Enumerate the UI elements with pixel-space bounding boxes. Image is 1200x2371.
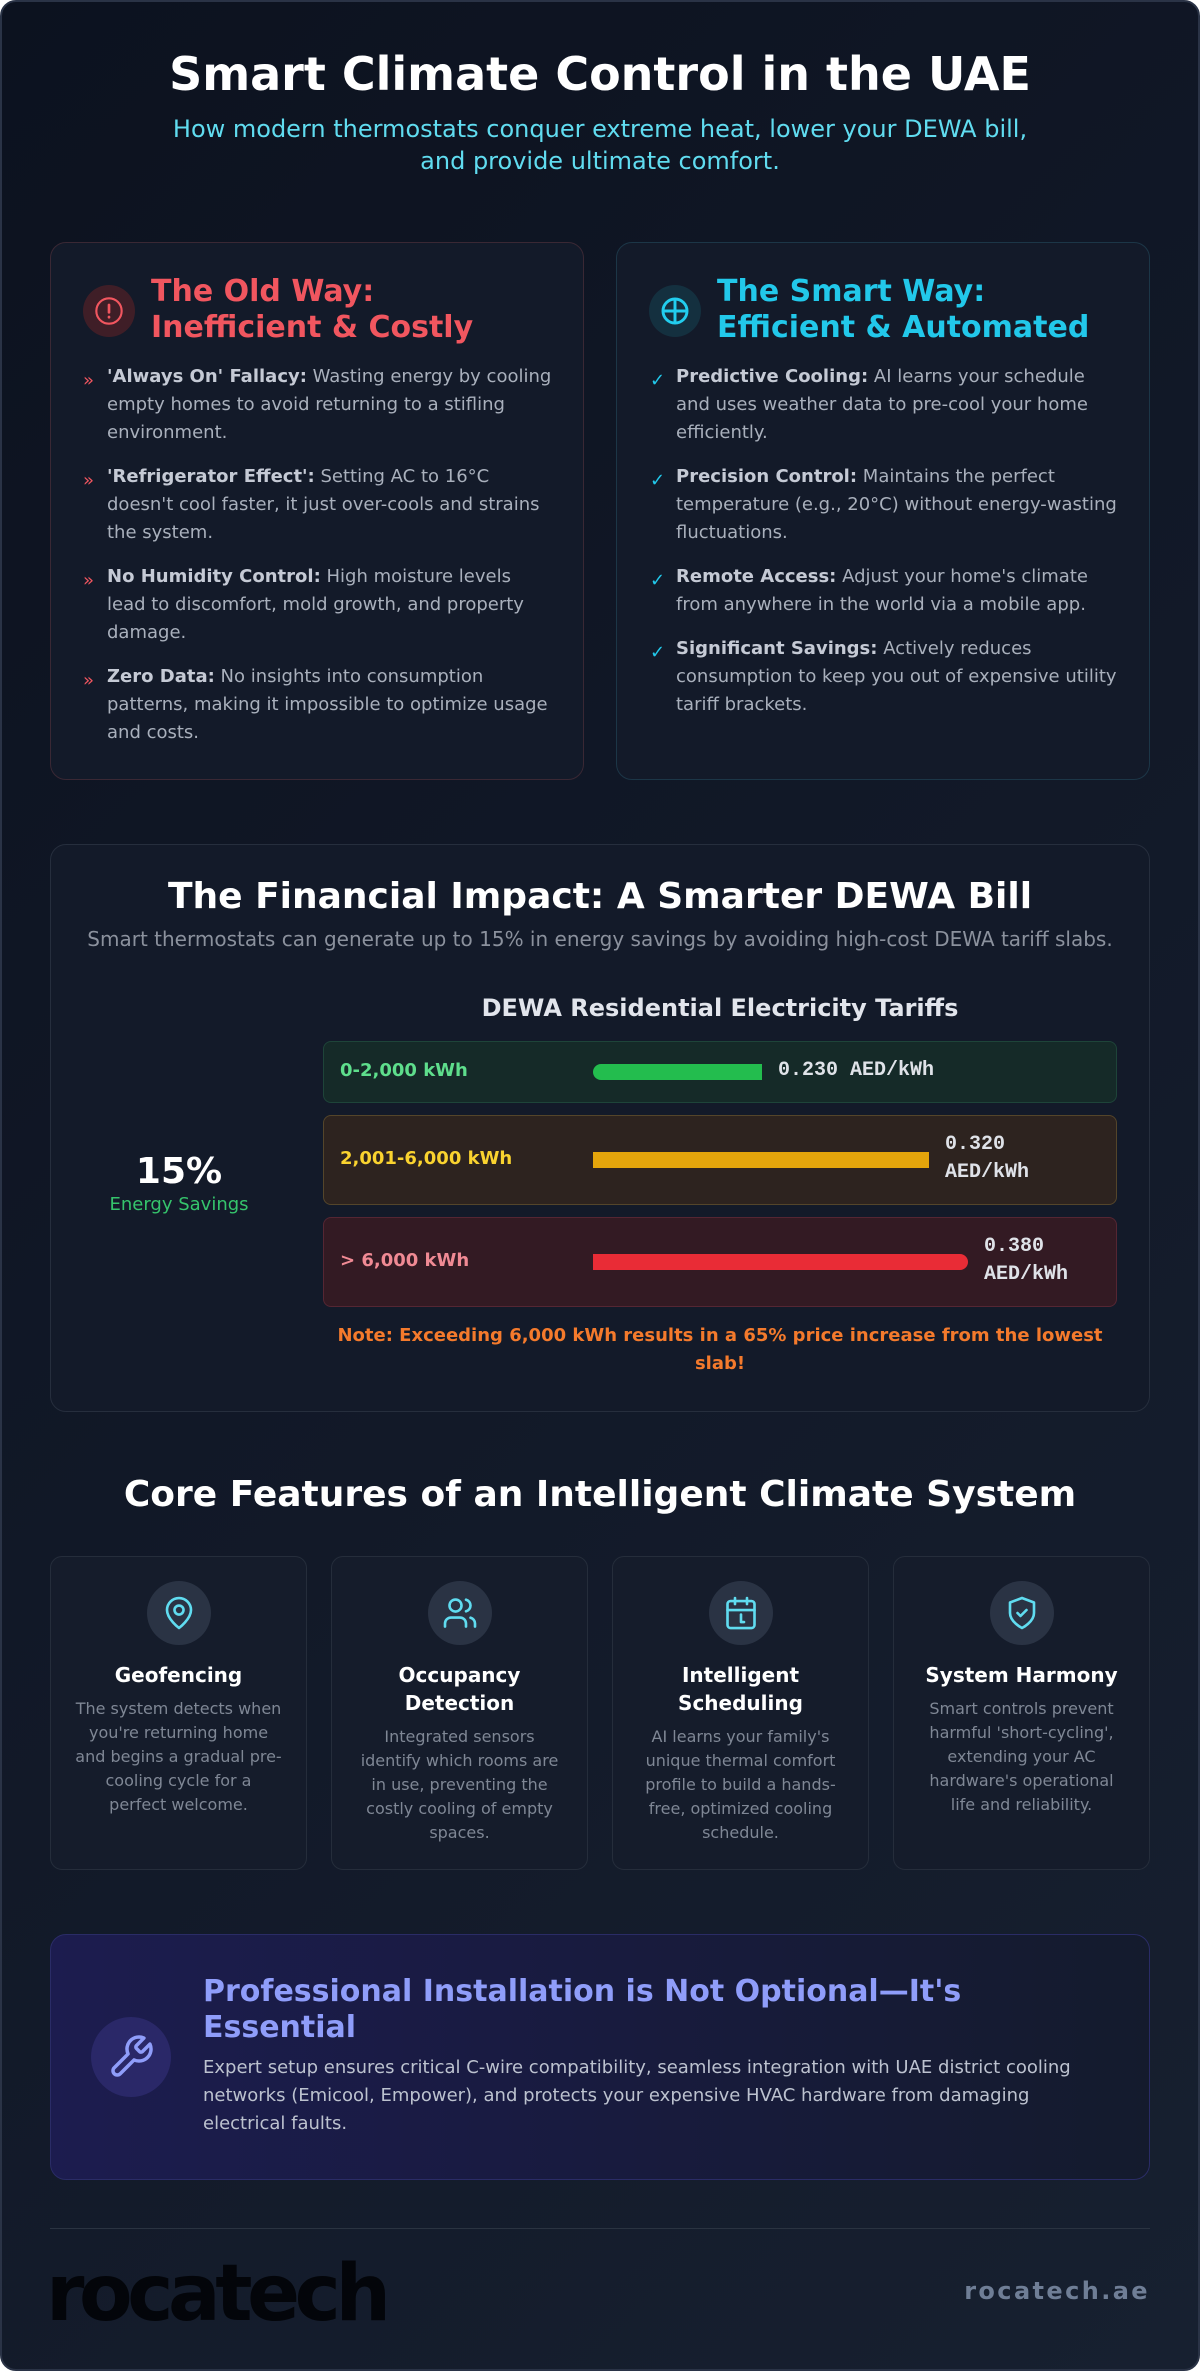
icon: calendar clock [709, 1581, 773, 1645]
feature text: intelligent scheduling: profile to build a hands- [645, 1775, 836, 1794]
stat value: 15% [136, 1151, 222, 1192]
heading: the old way: Inefficient & Costly [151, 310, 473, 345]
stat label: Energy Savings [109, 1194, 249, 1215]
tariff value: mid slab: 0.320 [945, 1133, 1005, 1156]
text: professional installation: networks (Emicool, Empower), and protects your expensive HVAC hardware from damaging [203, 2085, 1029, 2106]
tariff note [337, 1325, 1103, 1374]
feature title: occupancy detection [399, 1663, 520, 1715]
list item: precision control [650, 466, 1117, 543]
heading: the old way: The Old Way: [151, 274, 374, 309]
panel: the smart way [616, 242, 1150, 780]
list item: refrigerator effect [83, 466, 539, 543]
tariff bar: low slab [593, 1064, 762, 1080]
list item: zero data [83, 666, 548, 743]
list item: predictive cooling: and uses weather data to pre-cool your home [676, 394, 1088, 415]
feature text: occupancy detection: spaces. [429, 1823, 490, 1842]
feature text: occupancy detection: identify which rooms are [361, 1751, 558, 1770]
list item: always on fallacy [83, 366, 551, 443]
feature text: geofencing: The system detects when [76, 1699, 281, 1718]
list: smart way benefits [650, 366, 1117, 715]
financial subheading: Smart thermostats can generate up to 15% in energy savings by avoiding high-cost DEWA tariff slabs. [87, 927, 1113, 951]
list: old way problems: » [83, 470, 94, 491]
feature text: intelligent scheduling [645, 1727, 836, 1842]
subtitle: How modern thermostats conquer extreme heat, lower your DEWA bill, [173, 115, 1027, 143]
list item: remote access: Remote Access: Adjust your home's climate [676, 566, 1088, 587]
list: smart way benefits: ✓ [650, 470, 665, 491]
tariff value: mid slab [945, 1133, 1029, 1184]
list item: significant savings: consumption to keep you out of expensive utility [676, 666, 1117, 687]
list: old way problems: » [83, 670, 94, 691]
list item: no humidity control: No Humidity Control: High moisture levels [107, 566, 511, 587]
heading: professional installation: Essential [203, 2010, 356, 2045]
heading: professional installation: Professional Installation is Not Optional—It's [203, 1974, 961, 2009]
heading: core features: Core Features of an Intelligent Climate System [124, 1474, 1076, 1515]
tariff value: mid slab: AED/kWh [945, 1161, 1029, 1184]
list: smart way benefits: ✓ [650, 370, 665, 391]
list item: predictive cooling [650, 366, 1088, 443]
feature text: geofencing: perfect welcome. [109, 1795, 248, 1814]
list item: no humidity control: lead to discomfort, mold growth, and property [107, 594, 524, 615]
feature title: geofencing: Geofencing [115, 1663, 242, 1687]
subtitle: and provide ultimate comfort. [420, 147, 780, 175]
tariff row: low slab [323, 1041, 1117, 1103]
feature card: geofencing [50, 1556, 307, 1870]
text: professional installation [203, 2057, 1071, 2134]
list item: precision control: fluctuations. [676, 522, 788, 543]
list item: zero data: Zero Data: No insights into consumption [107, 666, 483, 687]
feature text: geofencing [75, 1699, 282, 1814]
list item: predictive cooling: Predictive Cooling: AI learns your schedule [676, 366, 1085, 387]
icon: users [428, 1581, 492, 1645]
list: smart way benefits: ✓ [650, 642, 665, 663]
feature text: system harmony: Smart controls prevent [929, 1699, 1114, 1718]
feature text: system harmony: harmful 'short-cycling', [929, 1723, 1114, 1742]
panel: professional installation [50, 1934, 1150, 2180]
icon: location pin [147, 1581, 211, 1645]
heading: financial impact: The Financial Impact: A Smarter DEWA Bill [168, 876, 1032, 917]
tariff note: Note: Exceeding 6,000 kWh results in a 65% price increase from the lowest [337, 1325, 1103, 1346]
feature card: occupancy detection [331, 1556, 588, 1870]
list item: significant savings [650, 638, 1117, 715]
subtitle [173, 115, 1027, 175]
list item: no humidity control: damage. [107, 622, 186, 643]
tariff row: high slab [323, 1217, 1117, 1307]
tariff value: low slab: 0.230 AED/kWh [778, 1059, 934, 1082]
list item: always on fallacy: environment. [107, 422, 227, 443]
feature text: geofencing: and begins a gradual pre- [75, 1747, 282, 1766]
heading: the smart way: Efficient & Automated [717, 310, 1089, 345]
icon: shield check [990, 1581, 1054, 1645]
feature text: system harmony: extending your AC [947, 1747, 1096, 1766]
list item: remote access: from anywhere in the world via a mobile app. [676, 594, 1086, 615]
list item: significant savings: tariff brackets. [676, 694, 807, 715]
list: old way problems: » [83, 570, 94, 591]
heading: the old way [151, 274, 473, 345]
feature text: occupancy detection [361, 1727, 558, 1842]
feature text: intelligent scheduling: schedule. [702, 1823, 779, 1842]
tariff row: mid slab [323, 1115, 1117, 1205]
feature text: occupancy detection: costly cooling of empty [366, 1799, 553, 1818]
tariff value: high slab [984, 1235, 1068, 1286]
tariff bar: high slab [593, 1254, 968, 1270]
tariff value: high slab: 0.380 [984, 1235, 1044, 1258]
tariff label: mid slab: 2,001-6,000 kWh [340, 1148, 512, 1169]
title: Smart Climate Control in the UAE [169, 47, 1031, 101]
heading: the smart way: The Smart Way: [717, 274, 985, 309]
list: old way problems: » [83, 370, 94, 391]
list item: remote access [650, 566, 1088, 615]
feature text: intelligent scheduling: free, optimized cooling [649, 1799, 832, 1818]
footer url: rocatech.ae [964, 2277, 1150, 2305]
list item: refrigerator effect: 'Refrigerator Effect': Setting AC to 16°C [107, 466, 489, 487]
feature title: occupancy detection: Detection [405, 1691, 514, 1715]
icon: warning circle [83, 285, 135, 337]
feature card: intelligent scheduling [612, 1556, 869, 1870]
feature text: system harmony: hardware's operational [929, 1771, 1114, 1790]
feature text: intelligent scheduling: AI learns your family's [652, 1727, 829, 1746]
feature title: intelligent scheduling [678, 1663, 803, 1715]
heading: tariffs chart: DEWA Residential Electricity Tariffs [482, 994, 958, 1022]
list item: precision control: Precision Control: Maintains the perfect [676, 466, 1055, 487]
list item: refrigerator effect: the system. [107, 522, 213, 543]
list item: always on fallacy: 'Always On' Fallacy: Wasting energy by cooling [107, 366, 551, 387]
feature text: system harmony [929, 1699, 1114, 1814]
feature text: geofencing: cooling cycle for a [106, 1771, 251, 1790]
tariff label: low slab: 0-2,000 kWh [340, 1060, 468, 1081]
icon: wrench [91, 2017, 171, 2097]
list item: zero data: and costs. [107, 722, 199, 743]
heading: the smart way [717, 274, 1089, 345]
feature text: occupancy detection: Integrated sensors [384, 1727, 535, 1746]
list item: always on fallacy: empty homes to avoid returning to a stifling [107, 394, 505, 415]
feature title: system harmony: System Harmony [925, 1663, 1118, 1687]
feature text: occupancy detection: in use, preventing the [371, 1775, 548, 1794]
feature title: occupancy detection: Occupancy [399, 1663, 520, 1687]
feature title: intelligent scheduling: Intelligent [682, 1663, 799, 1687]
list item: significant savings: Significant Savings: Actively reduces [676, 638, 1032, 659]
list item: precision control: temperature (e.g., 20°C) without energy-wasting [676, 494, 1117, 515]
list item: no humidity control [83, 566, 524, 643]
panel: the old way [50, 242, 584, 780]
tariff value: high slab: AED/kWh [984, 1263, 1068, 1286]
feature title: intelligent scheduling: Scheduling [678, 1691, 803, 1715]
text: professional installation: electrical faults. [203, 2113, 347, 2134]
text: professional installation: Expert setup ensures critical C-wire compatibility, seamless integration with UAE district cooling [203, 2057, 1071, 2078]
tariff label: high slab: > 6,000 kWh [340, 1250, 469, 1271]
feature text: geofencing: you're returning home [89, 1723, 268, 1742]
feature text: system harmony: life and reliability. [951, 1795, 1092, 1814]
list: old way problems [83, 366, 551, 743]
feature text: intelligent scheduling: unique thermal comfort [646, 1751, 835, 1770]
list item: zero data: patterns, making it impossible to optimize usage [107, 694, 548, 715]
tariff note: slab! [695, 1353, 745, 1374]
list item: predictive cooling: efficiently. [676, 422, 768, 443]
stat: 15% energy savings [109, 1151, 249, 1215]
list item: refrigerator effect: doesn't cool faster, it just over-cools and strains [107, 494, 539, 515]
feature card: system harmony [893, 1556, 1150, 1870]
list: smart way benefits: ✓ [650, 570, 665, 591]
panel: financial impact [50, 844, 1150, 1412]
icon: smart circle [649, 285, 701, 337]
heading: professional installation [203, 1974, 961, 2045]
tariff bar: mid slab [593, 1152, 929, 1168]
